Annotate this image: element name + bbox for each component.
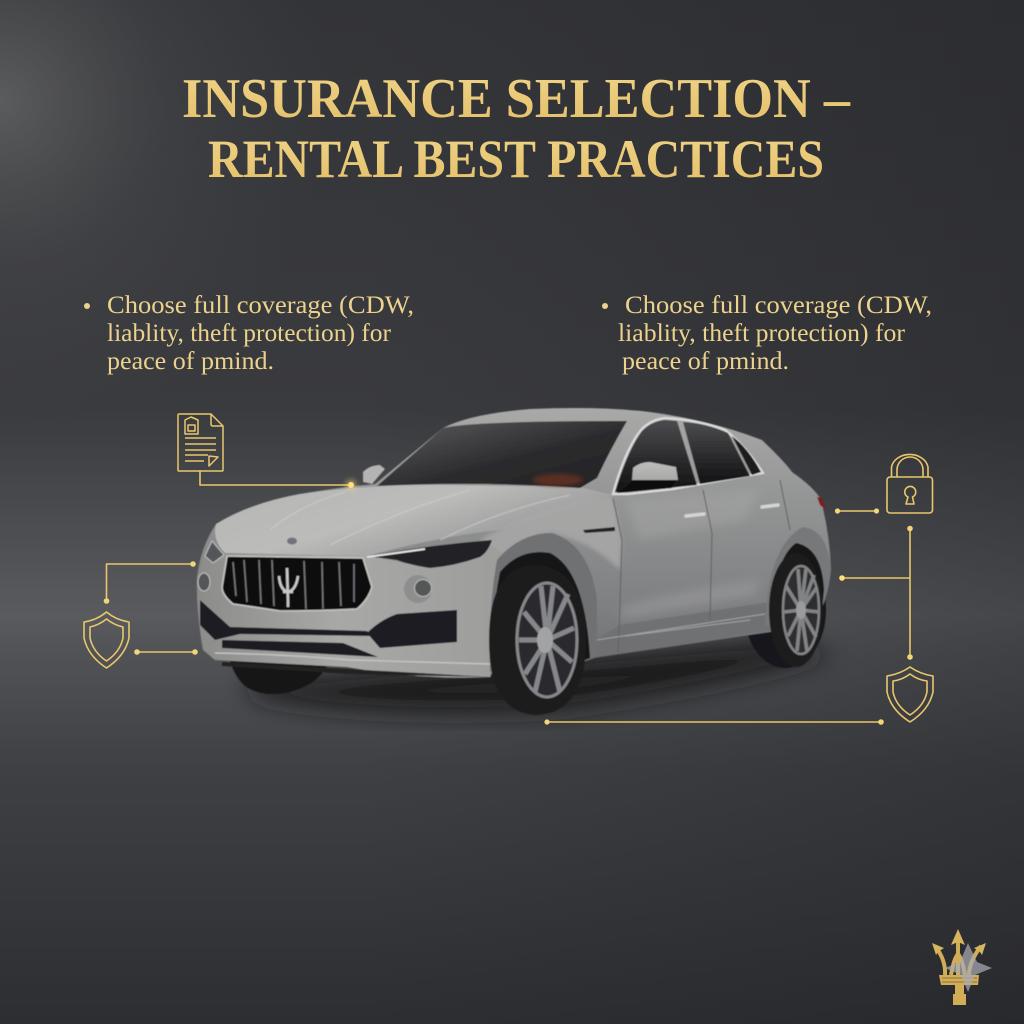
icon: right shield (887, 667, 933, 722)
text block: right bullet: liablity, theft protection) for (618, 320, 906, 347)
hood badge (287, 538, 297, 544)
title (182, 68, 851, 189)
interior tint (533, 474, 583, 486)
front wheel arch (490, 533, 597, 672)
windshield (377, 421, 627, 488)
right mirror (617, 462, 678, 493)
door handles (686, 505, 778, 516)
fender highlight (480, 495, 622, 570)
lower body tone (592, 602, 772, 658)
text block: left bullet: peace of pmind. (107, 348, 274, 375)
grille (222, 556, 372, 611)
door lines (613, 480, 790, 652)
door highlight (625, 490, 760, 540)
ground shadow (240, 640, 835, 715)
title: RENTAL BEST PRACTICES (208, 129, 824, 189)
text block: right bullet: peace of pmind. (622, 348, 789, 375)
sparkle (945, 943, 992, 992)
body silhouette (197, 408, 831, 678)
connector: left bottom (134, 649, 198, 655)
text block: left bullet: Choose full coverage (CDW, (107, 292, 414, 319)
front wheel rim (517, 583, 577, 697)
front tyre (489, 565, 586, 715)
icon: padlock (887, 454, 932, 513)
left mirror (363, 465, 385, 484)
lower intakes (200, 600, 457, 657)
fender vent badge (583, 527, 615, 533)
front-left wheel (230, 660, 329, 694)
sill chrome (597, 614, 765, 640)
splitter (215, 653, 490, 664)
hood (215, 485, 612, 556)
fog lights (198, 573, 432, 603)
rear side window (683, 422, 750, 484)
text block: right bullet: Choose full coverage (CDW, (625, 292, 932, 319)
quarter window (732, 436, 761, 475)
connector: right trunk (839, 526, 913, 660)
car (197, 408, 835, 715)
icon: document (178, 414, 223, 471)
taillight (817, 497, 826, 510)
text block: right bullet (602, 292, 932, 375)
title: INSURANCE SELECTION – (182, 68, 851, 130)
text block: left bullet (84, 292, 414, 375)
connector: bottom (544, 719, 884, 725)
text block: left bullet: liablity, theft protection) for (107, 320, 392, 347)
side windows (615, 420, 697, 492)
connector: lock to car (835, 508, 879, 514)
rear wheel arch (765, 527, 831, 630)
connector: document to car (200, 471, 356, 490)
icon: left shield (84, 612, 129, 668)
side window chrome (613, 418, 763, 494)
connector: left top (104, 561, 196, 604)
left headlight (205, 541, 224, 563)
rear wheel rim (783, 566, 819, 654)
hood creases (270, 490, 570, 545)
grille trident emblem (279, 568, 298, 607)
right headlight (367, 540, 492, 568)
front bumper (197, 545, 510, 678)
logo: trident (932, 929, 992, 1005)
rear tyre (744, 552, 826, 668)
rear arch opening and tyre (772, 543, 824, 632)
